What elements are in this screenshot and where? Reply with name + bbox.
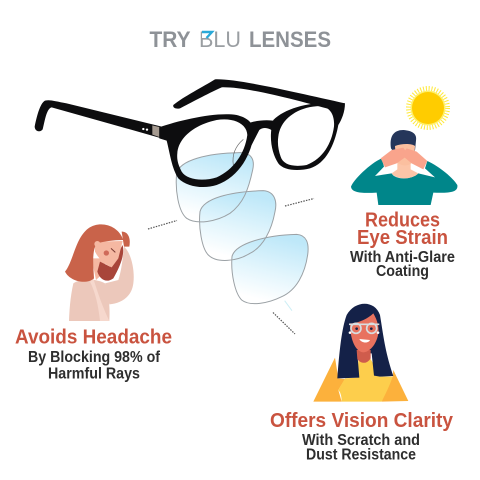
text: avoids headache: Harmful Rays [48,366,140,382]
title: BLU [199,27,241,52]
text: reduces eye strain: Eye Strain [357,226,448,249]
title [150,27,331,52]
icon: sun [408,88,448,128]
glasses [35,79,345,187]
text: offers vision clarity: With Scratch and [302,432,420,449]
text: offers vision clarity [270,409,454,464]
title: TRY [150,27,191,52]
text: avoids headache [15,326,172,382]
figure: woman with glasses [313,304,408,402]
text: avoids headache: Avoids Headache [15,326,172,348]
lenses [176,153,308,311]
text: reduces eye strain: Coating [376,263,429,280]
figure: woman with headache [65,224,134,321]
dotted connectors [148,198,314,334]
text: reduces eye strain [350,208,455,280]
text: reduces eye strain: Reduces [365,208,440,232]
figure: man covering eyes [351,130,457,205]
title: LENSES [249,27,331,52]
text: offers vision clarity: Dust Resistance [306,446,416,464]
text: reduces eye strain: With Anti-Glare [350,249,455,266]
text: offers vision clarity: Offers Vision Clarity [270,409,454,432]
text: avoids headache: By Blocking 98% of [28,349,161,366]
